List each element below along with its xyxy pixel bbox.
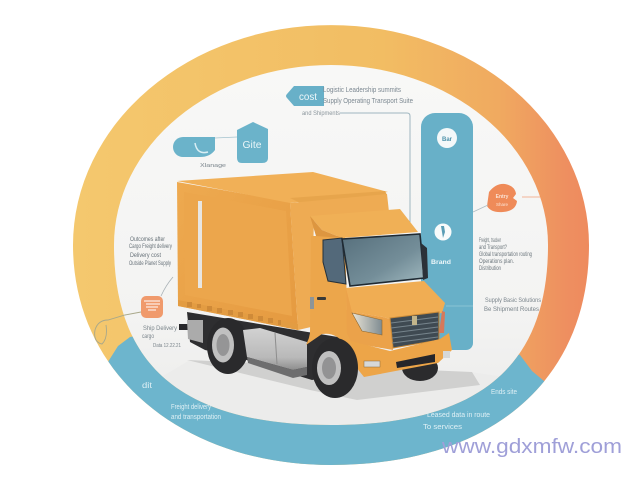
callout: top label with pill <box>286 86 413 232</box>
connector <box>215 137 237 138</box>
headlight <box>352 313 382 335</box>
front wheel <box>306 323 358 398</box>
ground plane <box>100 360 560 440</box>
text block: left lower: Data 12.22.21 <box>153 343 181 349</box>
fog lamps <box>364 361 380 367</box>
text block: left upper <box>129 237 172 267</box>
bumper <box>347 333 452 377</box>
text block: left upper: Outcomes after <box>130 237 165 243</box>
right indicator <box>439 311 445 333</box>
caption: Xlanage <box>200 163 226 169</box>
text block: right upper <box>479 238 532 272</box>
text on teal ring: To services <box>423 424 463 431</box>
ring: teal bottom segment <box>108 336 544 465</box>
icon: bar top badge <box>437 128 457 148</box>
callout: left pill and tag <box>173 122 268 169</box>
text block: right upper: Global transportation routing <box>479 252 532 258</box>
text on teal ring <box>142 381 517 431</box>
cab front lower <box>346 288 393 350</box>
callout: top label with pill: and Shipments <box>302 111 340 117</box>
cargo box front <box>290 194 389 330</box>
panel: teal vertical bar <box>421 113 473 350</box>
callout: orange blob right: Entry <box>496 194 509 200</box>
cargo box top <box>177 172 388 203</box>
bumper recess <box>396 354 435 368</box>
infographic canvas <box>73 25 620 465</box>
cab side <box>308 236 348 342</box>
ring: yellow to orange <box>70 20 592 470</box>
truck shadow <box>187 360 480 400</box>
callout: orange blob right <box>473 184 540 212</box>
side window <box>323 238 346 284</box>
callout: orange icon left <box>95 277 173 344</box>
connector line <box>340 113 410 232</box>
windshield <box>342 234 424 286</box>
grille <box>390 312 439 348</box>
hood <box>346 281 445 319</box>
icon: bar pin badge <box>434 224 452 240</box>
far front wheel <box>402 355 438 381</box>
cargo box side <box>177 182 298 330</box>
illustration: truck <box>177 172 480 400</box>
text block: left upper: Cargo Freight delivery <box>129 244 172 250</box>
pill <box>286 86 324 106</box>
text block: left lower: Ship Delivery <box>143 326 177 332</box>
text block: right upper: Operations plan. <box>479 259 514 265</box>
callout: orange blob right: Share <box>496 202 508 207</box>
text on teal ring: Leased data in route <box>427 412 490 419</box>
mirror <box>421 243 428 280</box>
pill <box>173 137 215 157</box>
callout: top label with pill: Supply Operating Transport Suite <box>323 98 413 105</box>
text block: right upper: Distribution <box>479 266 501 272</box>
pill label: cost <box>299 92 317 103</box>
text block: right lower <box>484 297 542 313</box>
text block: right upper: Freight, tracker <box>479 238 501 244</box>
inner panel <box>114 65 548 425</box>
text block: left upper: Delivery cost <box>130 253 161 259</box>
watermark: www.gdxmfw.com <box>441 436 622 458</box>
white door stripe <box>198 201 202 288</box>
rear mud guard <box>187 320 203 343</box>
rear wheel <box>207 318 249 374</box>
text block: right lower: Supply Basic Solutions <box>485 297 542 304</box>
door handle <box>317 297 326 300</box>
fuel tank <box>243 328 307 370</box>
text on teal ring: dit <box>142 381 153 390</box>
cab roof <box>310 209 418 238</box>
text block: left upper: Outside Planet Supply <box>129 261 171 267</box>
bar label: Brand <box>431 260 451 266</box>
text on teal ring: Ends site <box>491 389 517 396</box>
text on teal ring: Freight delivery <box>171 404 211 411</box>
top text block: Logistic Leadership summits <box>323 87 401 94</box>
chassis <box>187 312 356 380</box>
tag <box>237 122 268 163</box>
text block: left lower <box>142 326 181 349</box>
text block: left lower: cargo <box>142 334 155 340</box>
tag label: Gite <box>242 140 262 151</box>
text block: right lower: Be Shipment Routes <box>484 306 540 313</box>
box rail rivets <box>178 300 298 330</box>
text block: right upper: and Transport? <box>479 245 507 251</box>
text on teal ring: and transportation <box>171 414 221 421</box>
icon: bar top badge: Bar <box>442 137 453 143</box>
